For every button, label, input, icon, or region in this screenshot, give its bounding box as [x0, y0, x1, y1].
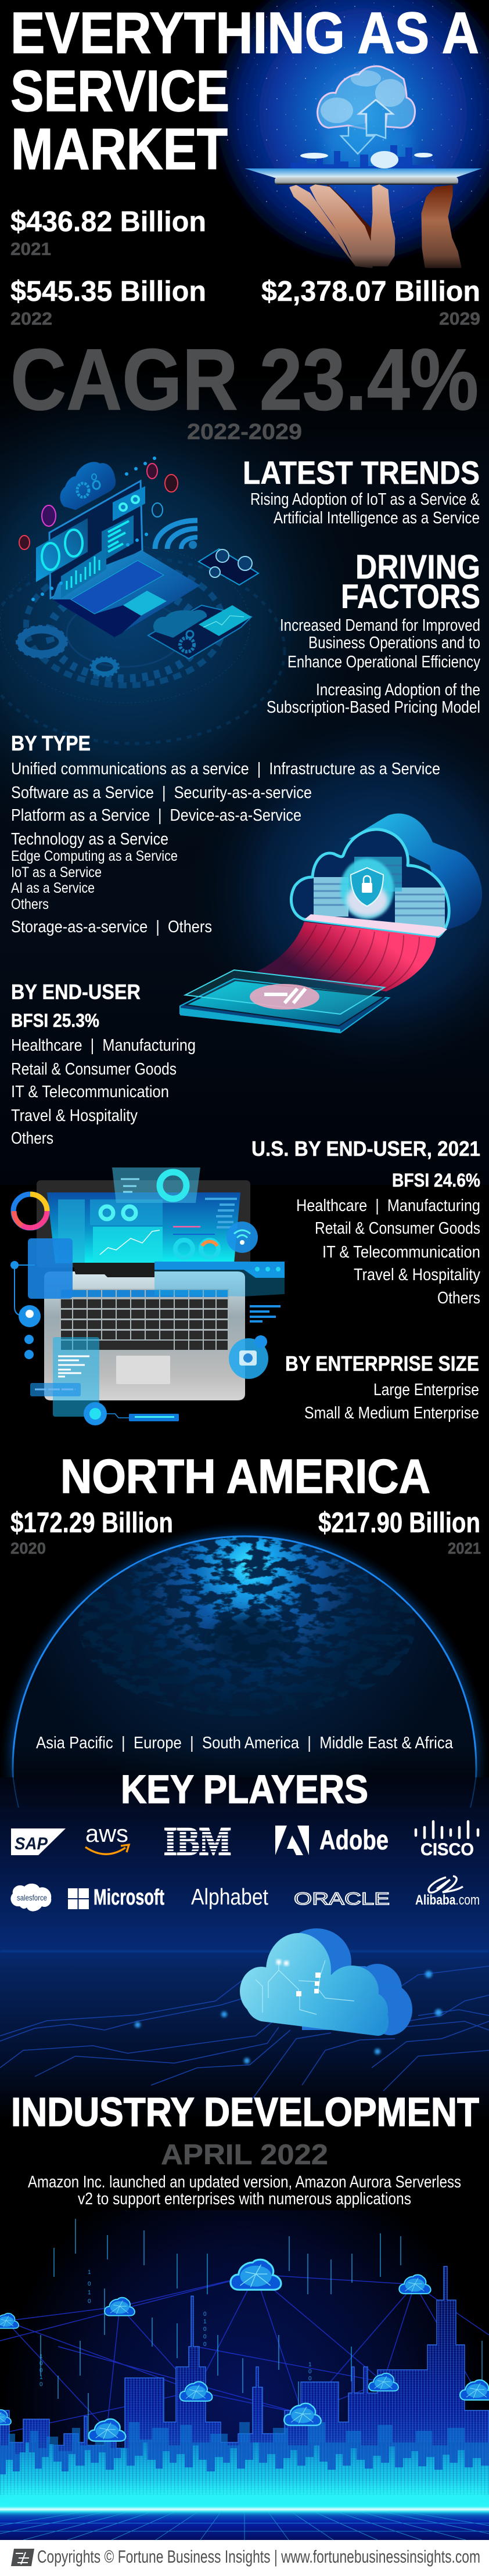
- front-view laptop illustration: [10, 1167, 285, 1425]
- atmosphere glow: [2, 1525, 487, 1777]
- binary digit columns: 1: [308, 2390, 312, 2396]
- horizon glow: [0, 2498, 489, 2517]
- skyline base glow: [0, 2486, 489, 2506]
- market value 2021: [10, 206, 206, 259]
- industry development: APRIL 2022: [161, 2139, 328, 2171]
- floating dots: [31, 457, 156, 601]
- title: MARKET: [11, 117, 228, 182]
- by type: IoT as a Service: [11, 864, 102, 881]
- footer logo: [11, 2549, 34, 2566]
- binary digit columns: 0: [88, 2281, 91, 2287]
- holographic cloud icon: [318, 66, 415, 154]
- market value 2029: $2,378.07 Billion: [261, 276, 480, 307]
- U.S. by end-user: [251, 1137, 481, 1307]
- binary digit columns: 0: [39, 2361, 43, 2367]
- screen: [47, 1192, 240, 1263]
- earth disc: [12, 1536, 477, 1777]
- logo: Salesforce: salesforce: [17, 1893, 47, 1902]
- connector node: [84, 1402, 179, 1425]
- U.S. by end-user: Others: [437, 1289, 480, 1307]
- floor: [0, 2510, 489, 2540]
- keyboard: [71, 561, 164, 614]
- panel: bar chart: [61, 548, 106, 598]
- logo: Cisco: CISCO: [420, 1840, 474, 1859]
- logo: Alphabet: Alphabet: [191, 1885, 268, 1910]
- logo: Adobe: Adobe: [319, 1824, 389, 1855]
- by end-user: Retail & Consumer Goods: [11, 1060, 177, 1079]
- gears on floor: [17, 627, 118, 676]
- key players heading: KEY PLAYERS: [121, 1767, 368, 1812]
- tablet side strip: [180, 1008, 340, 1033]
- binary digit columns: 1: [88, 2269, 91, 2276]
- by enterprise size: [285, 1352, 479, 1422]
- laptop front shadow: [52, 599, 141, 637]
- middle skyline: [0, 2422, 489, 2509]
- north america: 2021: [448, 1539, 481, 1557]
- tablet with cloud and chart: [148, 605, 251, 659]
- tablet body: [275, 177, 458, 185]
- binary digit columns: [39, 2269, 312, 2396]
- code snippet lines: [250, 1306, 281, 1321]
- binary digit columns: 0: [308, 2383, 312, 2389]
- hand fingers: [290, 185, 461, 267]
- near skyline window grid: [0, 2442, 489, 2495]
- binary digit columns: 1: [203, 2319, 207, 2325]
- by end-user: [11, 980, 196, 1148]
- floating donut panel: [112, 1167, 200, 1203]
- binary digit columns: 0: [308, 2376, 312, 2382]
- market value 2022: $545.35 Billion: [10, 276, 206, 307]
- binary digit columns: 0: [308, 2369, 312, 2375]
- by type: Technology as a Service: [11, 830, 168, 849]
- cloud back extrusion: [282, 1928, 412, 2035]
- big 3D cloud: [240, 1928, 412, 2036]
- phone with icons: [199, 549, 258, 585]
- tablet body: [180, 979, 389, 1033]
- binary digit columns: 0: [203, 2311, 207, 2318]
- wifi symbol: [155, 520, 197, 549]
- market value 2029: 2029: [439, 308, 480, 329]
- cloud back extrusion: [348, 814, 482, 929]
- by type: Others: [11, 896, 49, 912]
- cloud with gears: [60, 462, 116, 510]
- tablet screen: [186, 980, 384, 1026]
- binary digit columns: 1: [39, 2374, 43, 2381]
- binary digit columns: 0: [203, 2326, 207, 2333]
- orbit rings: [0, 546, 285, 743]
- panel: list: [102, 515, 134, 562]
- tablet screen glow: [245, 168, 482, 178]
- logo: SAP: [11, 1828, 66, 1855]
- cloud nodes: [0, 2259, 489, 2441]
- right status bar: [154, 1262, 285, 1296]
- far skyline: [0, 2266, 489, 2509]
- touchpad: [116, 1356, 170, 1384]
- by type: Unified communications as a service | Infrastructure as a Service: [11, 760, 440, 778]
- logo: Alibaba: Alibaba.com: [415, 1892, 480, 1908]
- donut chart: [13, 1194, 47, 1228]
- other regions: Asia Pacific | Europe | South America | Middle East & Africa: [36, 1734, 453, 1752]
- by end-user: BY END-USER: [11, 980, 141, 1004]
- panel: gears: [113, 486, 145, 521]
- footer band: [0, 2540, 489, 2576]
- by end-user: IT & Telecommunication: [11, 1083, 169, 1101]
- cloud lights: [276, 1960, 321, 1996]
- market value 2021: $436.82 Billion: [10, 206, 206, 238]
- latest trends: [243, 454, 480, 527]
- market value 2022: 2022: [10, 308, 52, 329]
- by type: AI as a Service: [11, 880, 95, 896]
- user badge: [250, 984, 319, 1009]
- floating status icons: [19, 464, 178, 549]
- circuit glow nodes: [135, 1971, 442, 2064]
- binary digit columns: 0: [203, 2341, 207, 2348]
- by type: [11, 731, 440, 936]
- horizon glow line: [0, 1950, 489, 1952]
- near skyline: [0, 2442, 489, 2509]
- data stream: [256, 922, 436, 991]
- cloud circuit traces: [256, 1960, 354, 2014]
- logo: aws: aws: [85, 1820, 128, 1847]
- earth limb continuation: [12, 1768, 477, 1808]
- city background: [0, 2210, 489, 2540]
- wifi badge: [226, 1221, 258, 1253]
- hero illustration: hand holding tablet with cloud: [211, 0, 489, 267]
- industry development: [11, 2089, 479, 2208]
- isometric laptop illustration: [0, 457, 285, 743]
- security cloud illustration: [180, 814, 482, 1033]
- market value 2022: [10, 276, 206, 329]
- glass layer: [185, 970, 384, 1014]
- by type: Edge Computing as a Service: [11, 848, 178, 864]
- title: [10, 1, 479, 182]
- market value 2021: 2021: [10, 239, 51, 259]
- camera badge: [229, 1335, 268, 1379]
- hinge: [73, 1263, 154, 1277]
- data rain lights: [41, 2219, 482, 2440]
- binary digit columns: 1: [88, 2290, 91, 2296]
- binary digit columns: 0: [39, 2367, 43, 2374]
- earth land texture: [78, 1536, 415, 1716]
- by end-user: Healthcare | Manufacturing: [11, 1036, 196, 1055]
- north america: 2020: [10, 1539, 46, 1557]
- translucent list panel: [35, 1337, 99, 1417]
- binary digit columns: 1: [39, 2354, 43, 2360]
- laptop base: [52, 551, 200, 637]
- logo: Adobe: [275, 1824, 389, 1855]
- dashboard panels: [58, 1199, 237, 1263]
- market value 2029: [261, 276, 480, 329]
- logo: Microsoft: [68, 1885, 164, 1910]
- far skyline window grid: [0, 2266, 489, 2509]
- binary digit columns: 0: [39, 2381, 43, 2388]
- north america: [10, 1449, 481, 1557]
- logo: Alibaba: [415, 1876, 480, 1908]
- keyboard deck: [44, 1271, 245, 1400]
- network lines: [0, 2275, 489, 2434]
- cloud front: [291, 829, 449, 936]
- by type: BY TYPE: [11, 731, 91, 755]
- driving factors: [267, 548, 481, 717]
- binary digit columns: 0: [88, 2298, 91, 2305]
- keys: [60, 1289, 228, 1350]
- logo: IBM: IBM: [164, 1819, 231, 1863]
- title: SERVICE: [10, 59, 229, 124]
- logo: Microsoft: Microsoft: [94, 1885, 164, 1910]
- panel: rings: [36, 518, 88, 582]
- floor perspective grid: [0, 2512, 489, 2540]
- left info panel: [28, 1238, 73, 1299]
- hero blue glow: [211, 0, 489, 263]
- hologram city: [290, 131, 436, 172]
- north america: $172.29 Billion: [10, 1507, 173, 1539]
- by end-user: Travel & Hospitality: [11, 1106, 138, 1125]
- connector and location pin: [10, 1261, 41, 1359]
- logo: Cisco: [416, 1821, 478, 1859]
- CAGR: 2022-2029: [187, 420, 302, 444]
- logo: Oracle: ORACLE: [294, 1889, 390, 1909]
- server stacks and shield: [314, 857, 445, 928]
- by type: Storage-as-a-service | Others: [11, 918, 212, 936]
- cloud front face: [240, 1933, 389, 2036]
- logo: SAP: SAP: [15, 1834, 48, 1853]
- industry development: v2 to support enterprises with numerous applications: [78, 2190, 411, 2208]
- by type: Software as a Service | Security-as-a-service: [11, 784, 312, 802]
- laptop screen frame: [49, 481, 142, 598]
- star field: [224, 0, 489, 250]
- key players background: [0, 1777, 489, 2120]
- north america: NORTH AMERICA: [60, 1449, 430, 1503]
- logo: Salesforce: [10, 1884, 51, 1912]
- small progress tag: [30, 1383, 81, 1396]
- by end-user: BFSI 25.3%: [11, 1010, 99, 1031]
- by end-user: Others: [11, 1129, 53, 1148]
- data stream rows: [273, 925, 419, 990]
- circuit board lines: [0, 1966, 489, 2103]
- by type: Platform as a Service | Device-as-a-Service: [11, 806, 301, 825]
- screen bezel: [37, 1180, 250, 1267]
- binary digit columns: 1: [308, 2362, 312, 2368]
- cloud platform: [304, 914, 447, 936]
- touchpad: [123, 591, 167, 616]
- binary digit columns: 0: [203, 2334, 207, 2340]
- digital city illustration: [0, 2210, 489, 2540]
- earth illustration: [2, 1525, 487, 1777]
